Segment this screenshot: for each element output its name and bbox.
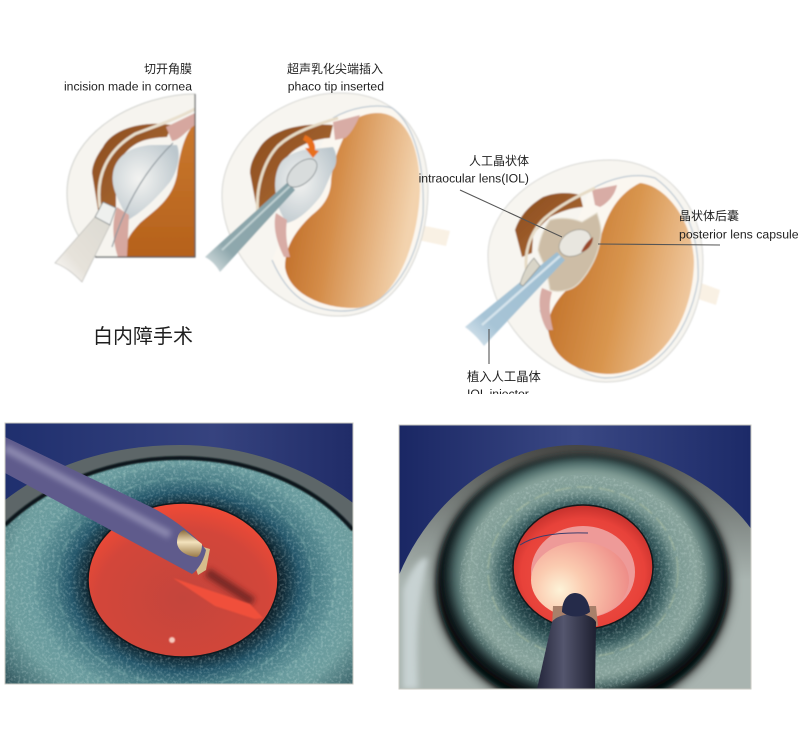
- choroid line: [540, 176, 698, 378]
- iris: [250, 124, 333, 210]
- iris dark surround: [437, 458, 729, 712]
- intraocular lens: [554, 224, 596, 262]
- orange arrow: [303, 135, 319, 158]
- sclera: [488, 160, 703, 382]
- injector wedge: [520, 258, 540, 286]
- label: incision made in cornea: incision made in cornea: [64, 80, 192, 94]
- haptic filament: [520, 533, 588, 545]
- leader line: injector: [488, 329, 490, 364]
- label: IOL injector: 植入人工晶体: [467, 369, 541, 384]
- photo: lens implanted in eye: [399, 425, 752, 712]
- probe highlight: [5, 448, 170, 535]
- lens: [113, 145, 179, 220]
- cornea cut line: [112, 143, 173, 247]
- iris: [92, 124, 172, 210]
- label: posterior lens capsule: [679, 208, 799, 242]
- injector highlight: [482, 256, 560, 325]
- label: incision made in cornea: 切开角膜: [144, 62, 192, 76]
- label: incision made in cornea: [64, 62, 192, 94]
- iris: [437, 455, 729, 711]
- label: intraocular lens: [419, 154, 529, 186]
- gold tip: [195, 546, 210, 575]
- incision: [173, 578, 263, 619]
- choroid line: [272, 106, 423, 311]
- label: phaco tip inserted: [287, 61, 384, 94]
- iris rings: [35, 464, 335, 700]
- reflection: [169, 637, 175, 643]
- label: phaco tip inserted: phaco tip inserted: [288, 80, 384, 94]
- cornea edge: [526, 188, 595, 278]
- vitreous: [125, 123, 195, 257]
- probe highlight: [222, 186, 290, 250]
- probe shaft: [537, 614, 596, 689]
- lens fold: [581, 237, 593, 252]
- iris speckle: [459, 475, 707, 691]
- navy background: [6, 424, 352, 502]
- label: IOL injector: IOL injector: [467, 387, 529, 401]
- label: intraocular lens: intraocular lens(IOL): [419, 172, 529, 186]
- optic nerve: [418, 225, 450, 246]
- probe collar: [552, 606, 598, 627]
- capsule: [538, 213, 601, 292]
- illustration: phaco tip inserted: [205, 93, 450, 316]
- label: phaco tip inserted: 超声乳化尖端插入: [287, 61, 383, 76]
- photo: phaco probe in eye: [5, 423, 353, 700]
- iris top shadow: [5, 458, 353, 530]
- iris: [5, 458, 353, 684]
- photo frame left: [5, 423, 353, 684]
- vitreous: [285, 113, 420, 308]
- sclera, cropped: [67, 94, 195, 257]
- ciliary pink: [275, 115, 360, 257]
- ciliary pink: [113, 113, 195, 257]
- lens: [275, 147, 336, 223]
- cornea edge: [99, 109, 195, 208]
- sclera: [222, 93, 428, 316]
- surgical blade handle: [55, 217, 110, 282]
- eye rim: [6, 445, 352, 528]
- pupil: [513, 505, 653, 629]
- phaco tip: [282, 154, 322, 192]
- blade tip: [95, 202, 116, 225]
- probe: [5, 437, 206, 574]
- label: posterior lens capsule: posterior lens capsule: [679, 228, 799, 242]
- pupil: [88, 503, 278, 657]
- cornea edge: [257, 118, 338, 216]
- iris: [515, 193, 583, 257]
- vitreous: [548, 183, 694, 374]
- iris rings: [488, 487, 678, 657]
- label: IOL injector: [460, 369, 550, 402]
- phaco probe shaft: [205, 182, 295, 272]
- navy background: [400, 426, 750, 574]
- title: 白内障手术: [93, 325, 193, 348]
- label: intraocular lens: 人工晶状体: [469, 154, 529, 168]
- illustration: IOL implanted: [465, 160, 720, 382]
- crop frame: [95, 94, 195, 257]
- sclera ball: [399, 445, 752, 689]
- ciliary pink: [540, 185, 617, 330]
- incision shadow: [207, 572, 253, 602]
- gold window: [177, 530, 202, 557]
- clip strip under injector label: [460, 394, 550, 402]
- optic nerve: [695, 282, 720, 305]
- leader line: posterior capsule: [598, 244, 720, 245]
- photo frame right: [399, 425, 751, 689]
- label: posterior lens capsule: 晶状体后囊: [679, 208, 739, 223]
- lens bright centre: [531, 542, 629, 618]
- leader line: IOL: [460, 190, 562, 237]
- implanted lens: [531, 526, 635, 618]
- sclera highlight: [403, 558, 428, 689]
- injector tube: [465, 252, 565, 346]
- illustration: incision made in cornea: [55, 94, 195, 282]
- probe dome: [562, 593, 590, 616]
- iris speckle: [5, 458, 353, 684]
